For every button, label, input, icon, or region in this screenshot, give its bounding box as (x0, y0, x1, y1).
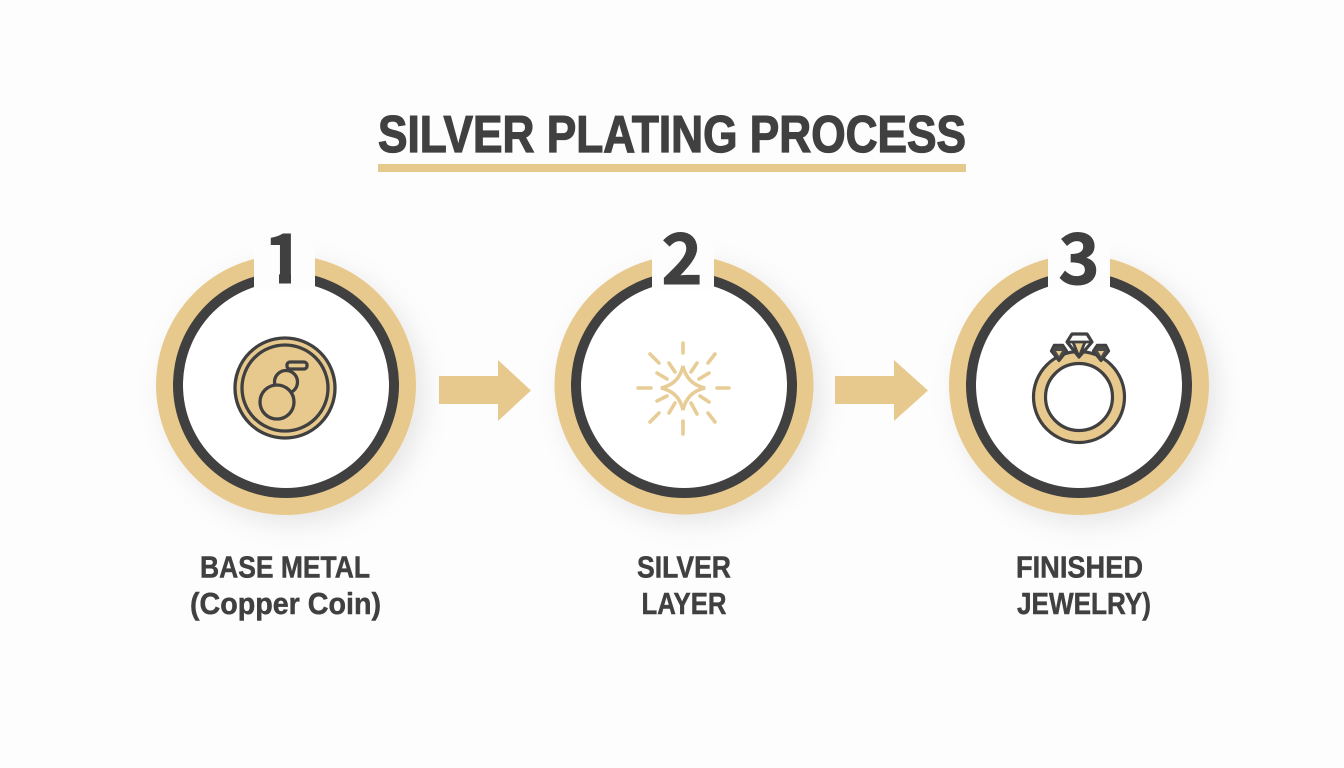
step number 3: 3 (1058, 204, 1100, 305)
label: finished jewelry (1016, 550, 1151, 621)
step number 1: 1 (264, 204, 304, 303)
label: silver layer: SILVER (637, 550, 731, 584)
title: SILVER PLATING PROCESS (378, 106, 966, 164)
step number 2: 2 (661, 204, 703, 305)
icon: diamond ring (1034, 334, 1124, 442)
label: finished jewelry: FINISHED (1016, 550, 1143, 584)
label: base metal: BASE METAL (200, 550, 370, 584)
label: silver layer: LAYER (642, 586, 726, 621)
infographic (156, 115, 1220, 621)
label: base metal (190, 550, 381, 621)
ring 1 (156, 240, 416, 515)
icon: sparkle (638, 343, 729, 434)
panel: step 3 finished jewelry (949, 204, 1209, 621)
arrow: step 2 to 3 (835, 360, 928, 421)
panel: step 1 base metal (156, 204, 416, 621)
ring 2 (554, 240, 814, 514)
label: base metal: (Copper Coin) (190, 586, 381, 621)
icon: copper coin (235, 338, 335, 438)
label: finished jewelry: JEWELRY) (1017, 586, 1151, 621)
panel: step 2 silver layer (554, 204, 814, 621)
arrow: step 1 to 2 (439, 360, 531, 421)
label: silver layer (637, 550, 731, 621)
ring 3 (949, 240, 1209, 515)
